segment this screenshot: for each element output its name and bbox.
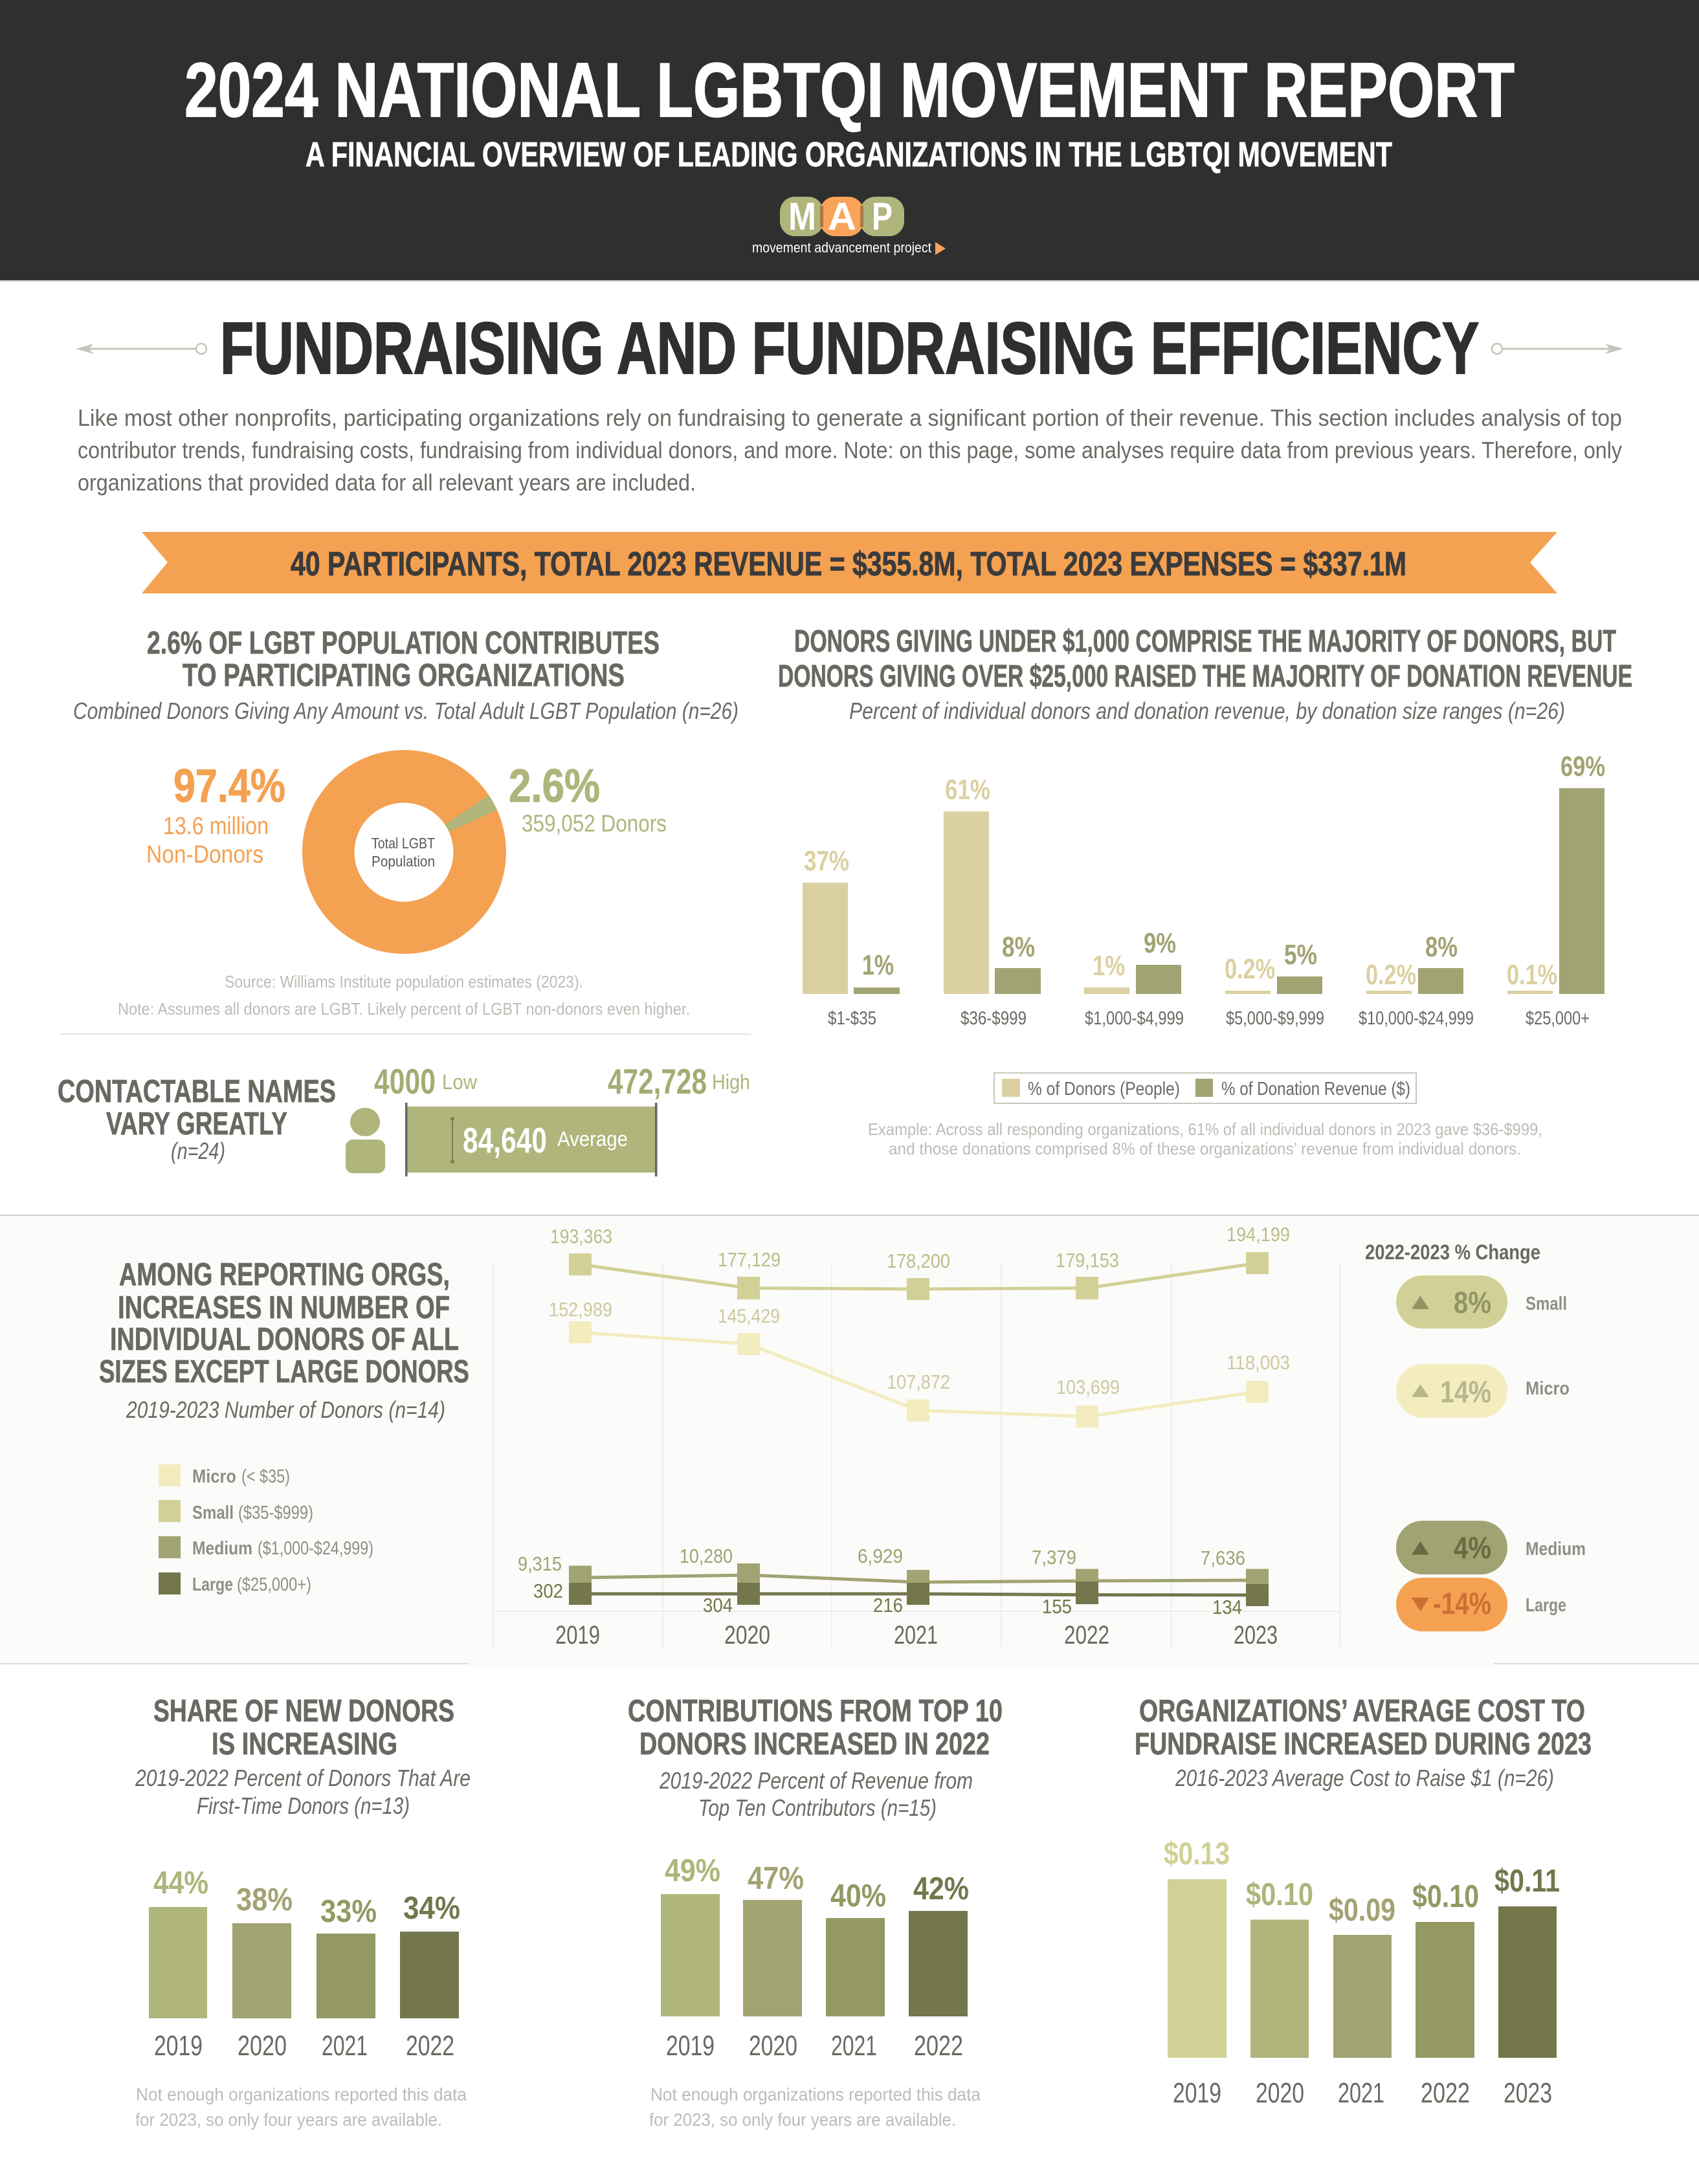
value labels: donors: 37%: [804, 845, 849, 877]
axis labels: $10,000-$24,999: [1359, 1008, 1474, 1029]
value labels: donors: 0.1%: [1507, 959, 1557, 991]
axis labels: $1,000-$4,999: [1085, 1008, 1184, 1029]
heading: VARY GREATLY: [106, 1107, 287, 1142]
subheading: 2016-2023 Average Cost to Raise $1 (n=26): [1175, 1765, 1554, 1791]
note: Not enough organizations reported this data: [136, 2084, 467, 2104]
note: for 2023, so only four years are available.: [135, 2110, 442, 2130]
bar chart: $0.11: [1494, 1864, 1560, 1899]
range bar: Average: [557, 1127, 628, 1151]
value labels: revenue: [862, 751, 1605, 981]
intro paragraph: [78, 404, 1622, 496]
heading: ORGANIZATIONS’ AVERAGE COST TO: [1139, 1694, 1585, 1728]
series: small donors: 194,199: [1227, 1223, 1290, 1246]
pill: micro: Micro: [1526, 1378, 1570, 1399]
value labels: revenue: 8%: [1002, 931, 1035, 963]
subheading: First-Time Donors (n=13): [197, 1792, 410, 1819]
panel: average cost to fundraise: [1135, 1694, 1592, 2109]
bar chart: 2022: [406, 2030, 454, 2062]
pill: micro: 14%: [1440, 1374, 1491, 1409]
series: micro donors: 152,989: [549, 1298, 612, 1321]
heading: FUNDRAISE INCREASED DURING 2023: [1135, 1727, 1592, 1761]
icon: person: [346, 1108, 385, 1173]
percent change panel: [1365, 1241, 1586, 1631]
legend: Large: [192, 1574, 233, 1595]
bar chart: 2020: [749, 2030, 797, 2062]
heading: [1135, 1694, 1592, 1761]
axis labels: $25,000+: [1526, 1008, 1590, 1029]
source note: Source: Williams Institute population estimates (2023).: [225, 972, 583, 991]
panel: donors by donation size: [778, 624, 1632, 1158]
year axis labels: 2022: [1064, 1621, 1109, 1649]
series: large donors: 134: [1212, 1596, 1242, 1618]
banner: [142, 532, 1557, 593]
bar chart: 44%: [153, 1866, 208, 1901]
bar chart: 2019: [666, 2030, 715, 2062]
subheading: 2019-2022 Percent of Donors That Are: [135, 1765, 471, 1791]
bar chart: 34%: [403, 1891, 460, 1926]
series: large donors: 302: [533, 1580, 563, 1602]
heading: DONORS INCREASED IN 2022: [639, 1727, 990, 1761]
series: micro donors: 103,699: [1056, 1376, 1120, 1398]
heading: SHARE OF NEW DONORS: [153, 1694, 454, 1728]
donut chart: [302, 750, 506, 954]
bar chart: 38%: [236, 1882, 293, 1917]
heading: INDIVIDUAL DONORS OF ALL: [110, 1322, 459, 1357]
axis labels: $36-$999: [961, 1008, 1027, 1029]
example note: [868, 1120, 1542, 1158]
value labels: donors: [804, 774, 1557, 991]
subheading: Percent of individual donors and donation revenue, by donation size ranges (n=26): [849, 698, 1565, 724]
pill: medium: 4%: [1454, 1530, 1491, 1565]
bar chart: 2020: [1256, 2077, 1304, 2109]
heading: [628, 1694, 1003, 1761]
range bar: [405, 1103, 658, 1176]
donut chart: Total LGBT: [372, 835, 435, 852]
bar chart: [149, 1866, 460, 2062]
bar chart: 2021: [1338, 2077, 1384, 2109]
series: small donors: 177,129: [718, 1248, 781, 1271]
series: large donors: [533, 1580, 1269, 1618]
bar chart: $0.13: [1164, 1837, 1230, 1871]
heading: IS INCREASING: [212, 1727, 397, 1761]
non-donors callout: [146, 760, 285, 868]
banner: 40 PARTICIPANTS, TOTAL 2023 REVENUE = $355.8M, TOTAL 2023 EXPENSES = $337.1M: [291, 546, 1406, 583]
series: large donors: 155: [1042, 1595, 1072, 1618]
legend: (< $35): [241, 1466, 290, 1487]
note: for 2023, so only four years are available.: [649, 2110, 956, 2130]
report subtitle: A FINANCIAL OVERVIEW OF LEADING ORGANIZATIONS IN THE LGBTQI MOVEMENT: [305, 135, 1392, 174]
legend: Small: [192, 1503, 234, 1523]
axis labels: $1-$35: [828, 1008, 876, 1029]
pill: medium: Medium: [1526, 1539, 1586, 1560]
legend: ($35-$999): [238, 1503, 313, 1523]
heading: [99, 1257, 469, 1389]
high value: 472,728: [608, 1061, 707, 1101]
donors callout: 359,052 Donors: [522, 810, 667, 837]
subheading: 2019-2022 Percent of Revenue from: [659, 1767, 973, 1794]
MAP logo: movement advancement project: [752, 239, 931, 256]
series: medium donors: 6,929: [858, 1545, 903, 1567]
pill: small: [1396, 1275, 1567, 1329]
bars: percent of donors: [803, 811, 1553, 994]
source note: Note: Assumes all donors are LGBT. Likely percent of LGBT non-donors even higher.: [118, 999, 690, 1019]
heading: CONTRIBUTIONS FROM TOP 10: [628, 1694, 1003, 1728]
MAP logo: [752, 195, 946, 256]
panel: top 10 contributions: [628, 1694, 1003, 2130]
series: medium donors: [518, 1545, 1269, 1592]
intro paragraph: organizations that provided data for all relevant years are included.: [78, 469, 696, 496]
legend: ($25,000+): [237, 1574, 311, 1595]
series: medium donors: 7,636: [1201, 1547, 1245, 1569]
non-donors callout: 13.6 million: [163, 813, 269, 840]
panel: contactable names: [58, 1061, 750, 1176]
high value: High: [712, 1070, 750, 1094]
subheading: Top Ten Contributors (n=15): [698, 1794, 937, 1821]
series: micro donors: 145,429: [718, 1305, 780, 1327]
value labels: donors: 0.2%: [1225, 953, 1275, 985]
series: small donors: 179,153: [1056, 1249, 1119, 1272]
value labels: revenue: 5%: [1284, 939, 1317, 971]
example note: and those donations comprised 8% of these organizations’ revenue from individual donors.: [889, 1139, 1521, 1158]
bar chart: 40%: [830, 1879, 886, 1914]
year axis labels: 2019: [555, 1621, 600, 1649]
bars: percent of revenue: [854, 788, 1605, 994]
legend: [159, 1464, 373, 1595]
example note: Example: Across all responding organizations, 61% of all individual donors in 2023 gave $36-$999,: [868, 1120, 1542, 1139]
arrow: right: [1492, 344, 1623, 354]
series: large donors: 304: [703, 1594, 733, 1616]
subheading: Combined Donors Giving Any Amount vs. Total Adult LGBT Population (n=26): [73, 698, 738, 724]
pill: small: Small: [1526, 1294, 1567, 1314]
value labels: donors: 1%: [1093, 950, 1125, 982]
heading: [153, 1694, 454, 1761]
panel: LGBT population contribution: [73, 626, 738, 1019]
subheading: 2019-2023 Number of Donors (n=14): [126, 1396, 445, 1423]
arrow: left: [76, 344, 206, 354]
bar chart: 2019: [1173, 2077, 1221, 2109]
legend: % of Donors (People): [1028, 1079, 1180, 1099]
year axis labels: [555, 1621, 1278, 1649]
year axis labels: 2023: [1234, 1621, 1278, 1649]
series: micro donors: 107,872: [887, 1371, 950, 1393]
range bar: 84,640: [463, 1120, 547, 1160]
MAP logo: P: [872, 195, 893, 238]
pill: large: Large: [1526, 1595, 1566, 1616]
panel: share of new donors: [135, 1694, 471, 2130]
low value: 4000: [374, 1061, 436, 1101]
bar chart: 33%: [320, 1894, 377, 1929]
value labels: donors: 61%: [945, 774, 990, 806]
legend: Micro: [192, 1466, 236, 1487]
subheading: [135, 1765, 471, 1819]
heading: [58, 1074, 336, 1142]
value labels: revenue: 9%: [1144, 927, 1176, 959]
panel: number of donors band: [0, 1215, 1699, 1667]
MAP logo: A: [828, 195, 856, 238]
heading: INCREASES IN NUMBER OF: [118, 1290, 450, 1325]
note: [649, 2084, 981, 2130]
legend: [994, 1073, 1416, 1103]
series: small donors: 178,200: [887, 1250, 950, 1272]
pill: large: -14%: [1433, 1586, 1491, 1620]
pill: micro: [1396, 1364, 1570, 1418]
bar chart: 2021: [322, 2030, 368, 2062]
series: large donors: 216: [873, 1594, 903, 1616]
axis labels: [828, 1008, 1590, 1029]
donors callout: 2.6%: [509, 760, 600, 812]
value labels: revenue: 69%: [1560, 751, 1605, 782]
heading: 2.6% OF LGBT POPULATION CONTRIBUTES: [147, 626, 660, 661]
series: micro donors: 118,003: [1227, 1351, 1290, 1374]
value labels: revenue: 1%: [862, 949, 894, 981]
bar chart: 2023: [1504, 2077, 1552, 2109]
non-donors callout: Non-Donors: [146, 841, 263, 868]
year axis labels: 2020: [724, 1621, 770, 1649]
value labels: donors: 0.2%: [1366, 959, 1416, 991]
bar chart: [1164, 1837, 1560, 2109]
series: medium donors: 10,280: [680, 1545, 733, 1567]
bar chart: 42%: [913, 1871, 969, 1906]
bar chart: 2021: [831, 2030, 877, 2062]
legend: ($1,000-$24,999): [258, 1538, 373, 1559]
MAP logo: M: [788, 195, 816, 238]
percent change heading: 2022-2023 % Change: [1365, 1241, 1540, 1264]
line chart: [493, 1223, 1340, 1649]
axis labels: $5,000-$9,999: [1226, 1008, 1324, 1029]
heading: AMONG REPORTING ORGS,: [119, 1257, 450, 1292]
heading: [778, 624, 1632, 694]
bar chart: [803, 751, 1605, 1029]
non-donors callout: 97.4%: [173, 760, 285, 812]
series: small donors: [550, 1223, 1290, 1300]
heading: TO PARTICIPATING ORGANIZATIONS: [183, 658, 625, 693]
source note: [118, 972, 690, 1019]
bar chart: $0.10: [1412, 1879, 1479, 1914]
bar chart: 49%: [665, 1853, 720, 1888]
bar chart: 2022: [914, 2030, 963, 2062]
bar chart: 47%: [748, 1861, 804, 1896]
low value: Low: [442, 1070, 478, 1094]
subheading: [659, 1767, 973, 1821]
bar chart: 2020: [238, 2030, 287, 2062]
series: small donors: 193,363: [550, 1225, 612, 1248]
bar chart: 2019: [154, 2030, 203, 2062]
value labels: revenue: 8%: [1425, 931, 1458, 963]
donut chart: Population: [372, 853, 435, 870]
year axis labels: 2021: [894, 1621, 938, 1649]
note: Not enough organizations reported this data: [650, 2084, 981, 2104]
donors callout: [509, 760, 667, 837]
series: micro donors: [549, 1298, 1290, 1428]
intro paragraph: Like most other nonprofits, participating organizations rely on fundraising to generate a significant portion of their revenue. This section includes analysis of top: [78, 404, 1622, 431]
bar chart: $0.10: [1246, 1877, 1313, 1912]
bar chart: [661, 1853, 969, 2062]
pill: medium: [1396, 1521, 1586, 1574]
series: medium donors: 9,315: [518, 1552, 562, 1575]
legend: Medium: [192, 1538, 252, 1559]
sample size: (n=24): [171, 1138, 225, 1164]
note: [135, 2084, 467, 2130]
heading: [147, 626, 660, 693]
heading: SIZES EXCEPT LARGE DONORS: [99, 1354, 469, 1389]
heading: CONTACTABLE NAMES: [58, 1074, 336, 1109]
bar chart: $0.09: [1329, 1893, 1395, 1928]
pill: large: [1396, 1578, 1566, 1631]
legend: % of Donation Revenue ($): [1221, 1079, 1410, 1099]
bar chart: 2022: [1421, 2077, 1470, 2109]
series: medium donors: 7,379: [1032, 1546, 1076, 1569]
pill: small: 8%: [1454, 1285, 1491, 1319]
header band: [0, 0, 1699, 281]
